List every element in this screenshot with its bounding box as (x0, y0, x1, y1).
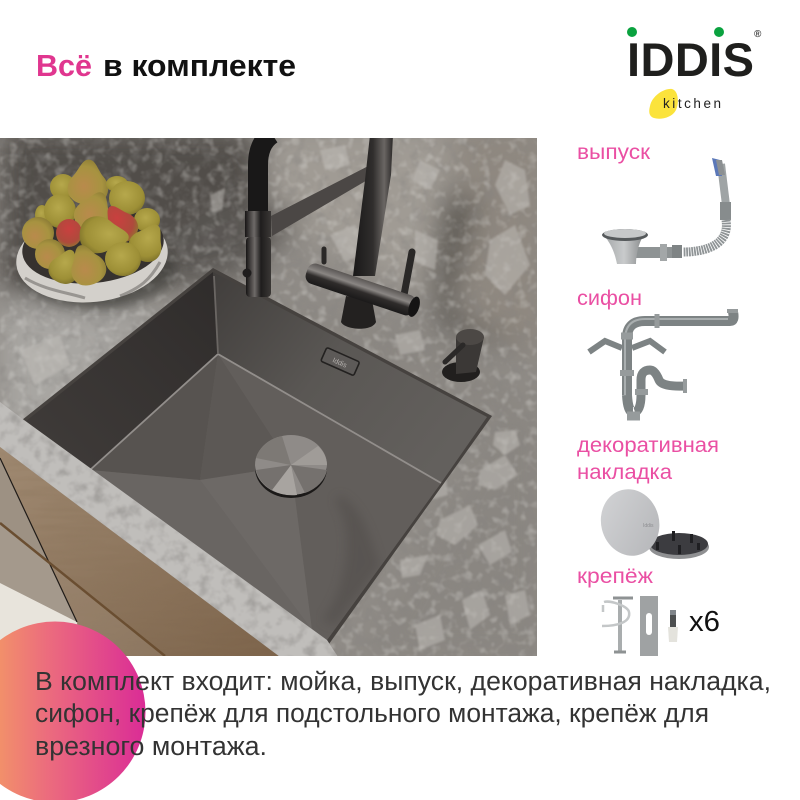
faucet black hose (258, 134, 272, 222)
siphon highlight (625, 319, 728, 395)
icon: decorative cover (594, 483, 709, 562)
outlet overflow tube (721, 164, 726, 205)
sink left wall (26, 272, 218, 470)
sink seam highlights (90, 276, 441, 483)
sink brand tab: Iddis (331, 357, 348, 370)
siphon main pipe (627, 312, 734, 395)
outlet clamps (660, 244, 667, 261)
floor (0, 583, 78, 640)
fastener plate slot (646, 613, 652, 635)
sink brand tab (321, 347, 360, 376)
body text: врезного монтажа. (35, 733, 267, 761)
outlet overflow head (712, 158, 722, 176)
label: крепёж: крепёж (577, 564, 654, 588)
soap dispenser (442, 329, 484, 382)
label: сифон: сифон (577, 286, 642, 310)
outlet cone (606, 238, 642, 264)
faucet spout column (353, 135, 393, 276)
cover brand mark: Iddis (643, 523, 654, 529)
sink drain shadow (255, 466, 327, 498)
logo wordmark: IDDIS (627, 33, 754, 86)
title: в комплекте (103, 48, 296, 83)
logo kitchen text: kitchen (663, 96, 721, 111)
multiplier x6: x6 (689, 606, 720, 638)
icon: mounting hardware (602, 596, 678, 656)
label: выпуск: выпуск (577, 140, 651, 164)
sink reflection (334, 510, 373, 614)
fastener plate (640, 596, 658, 656)
sink drain cover (255, 435, 327, 495)
faucet button (242, 268, 252, 278)
faucet mixer body (306, 264, 420, 317)
logo registered mark: ® (754, 29, 762, 40)
sink dark rim (22, 268, 492, 644)
sink basin (22, 268, 492, 644)
faucet handles (324, 249, 412, 295)
faucet head (246, 237, 271, 297)
cabinet door gaps (0, 458, 165, 656)
outlet pipe (632, 247, 682, 258)
countertop stone (0, 130, 545, 660)
siphon trap (635, 370, 685, 412)
bowl body (16, 236, 168, 302)
faucet base (341, 296, 376, 329)
cabinet pale panel (0, 458, 77, 622)
siphon couplings (620, 311, 738, 416)
countertop stones (20, 145, 530, 650)
cover plate (594, 483, 666, 562)
faucet head collar (245, 211, 271, 237)
title: Всё (36, 48, 92, 83)
faucet (242, 134, 422, 329)
icon: siphon (589, 311, 738, 416)
bowl interior (22, 213, 164, 284)
siphon side arms (589, 341, 622, 352)
icon: drain outlet (602, 158, 731, 264)
faucet swivel arm (271, 167, 366, 236)
sink back wall (232, 305, 487, 482)
pears (22, 160, 162, 286)
icon: logo green dots (627, 27, 724, 37)
body text: сифон, крепёж для подстольного монтажа, крепёж для (35, 700, 709, 728)
outlet corrugated hose (683, 220, 726, 252)
fastener screw (668, 610, 678, 642)
outlet coupling (720, 202, 731, 220)
sink floor facets (90, 354, 218, 480)
fastener bolt (602, 598, 633, 652)
cabinet wood front (0, 447, 284, 660)
bowl shadow (19, 251, 179, 313)
sink floor (175, 478, 176, 479)
outlet strainer (602, 229, 648, 241)
cabinet and floor (0, 440, 285, 660)
body text: В комплект входит: мойка, выпуск, декоративная накладка, (35, 668, 771, 696)
photo: kitchen sink (0, 130, 545, 662)
cover underside (649, 535, 709, 559)
gradient circle (0, 622, 146, 800)
label: декоративная накладка: накладка (577, 460, 672, 484)
label: декоративная накладка: декоративная (577, 433, 719, 457)
icon: logo yellow blob (649, 89, 678, 119)
logo: IDDIS kitchen (627, 27, 762, 119)
cover pins (656, 531, 700, 554)
countertop front edge (0, 400, 345, 662)
bowl of pears (12, 159, 176, 310)
